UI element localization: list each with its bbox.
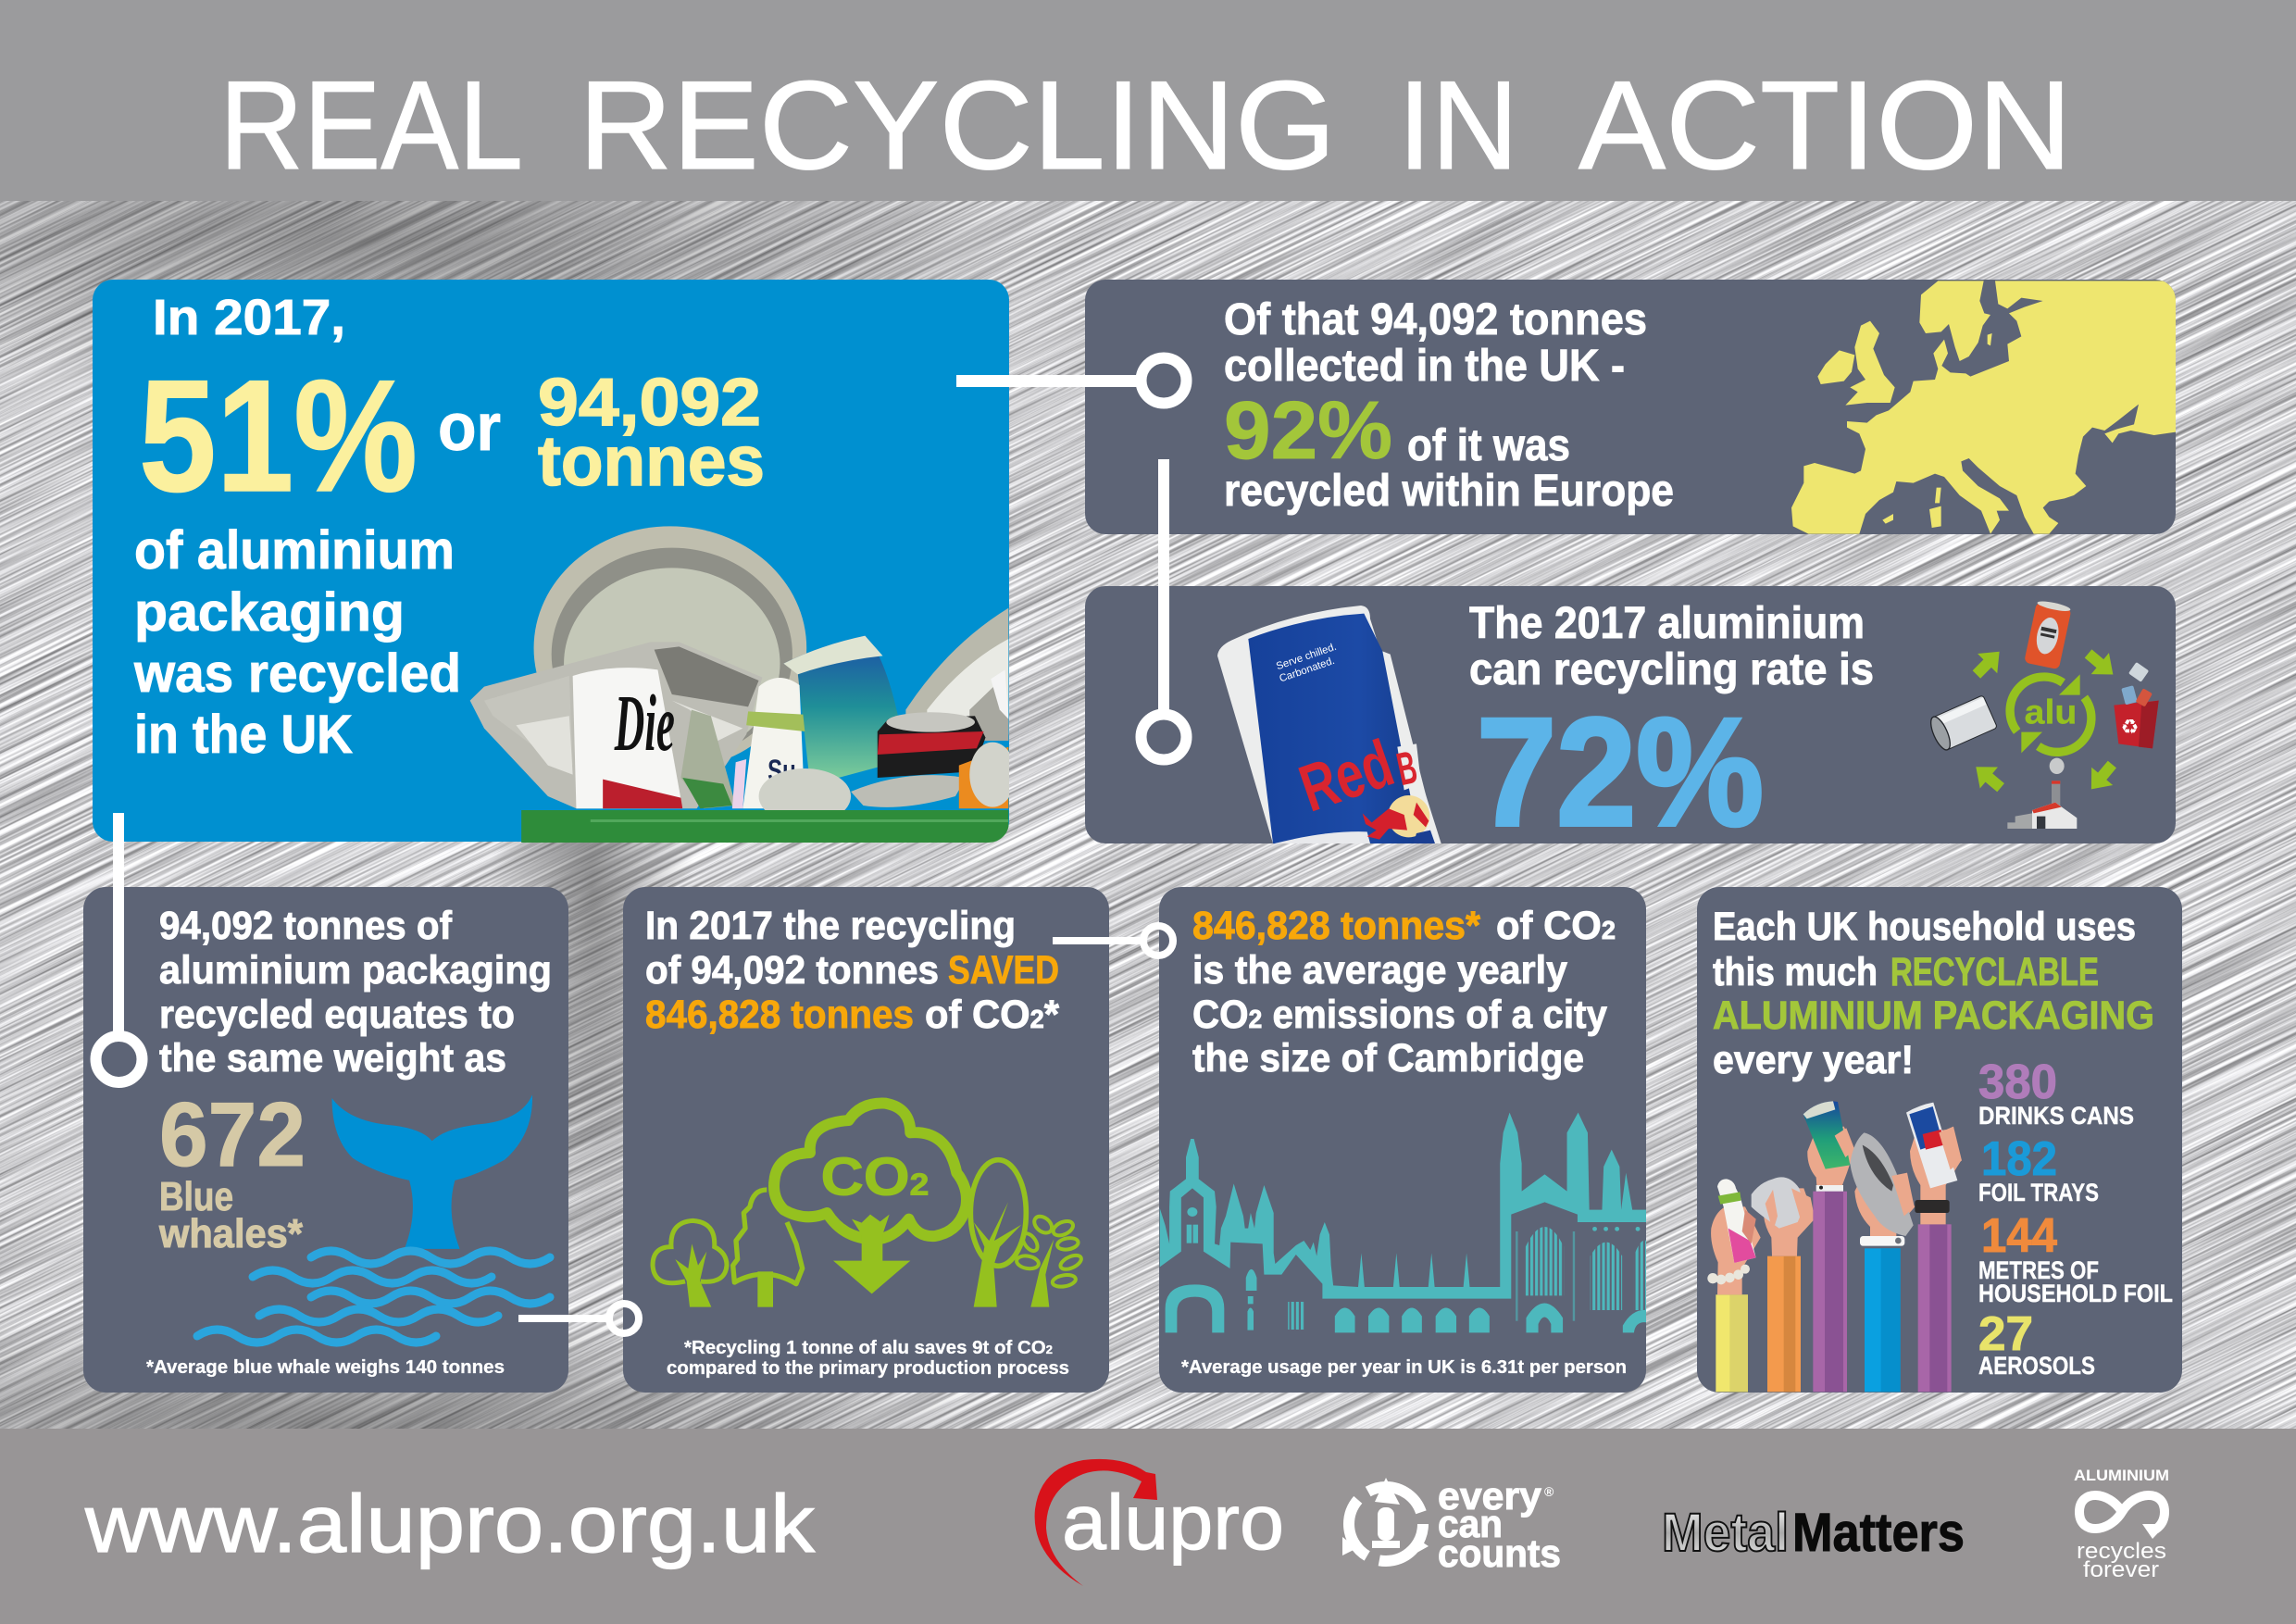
logo: aluminium recycles forever: ALUMINIUM [2074,1467,2169,1484]
text: household uses: RECYCLABLE [1890,950,2099,994]
panel: blue whales [83,887,568,1393]
text: household uses [1713,905,2154,1082]
logo: every can counts: every [1438,1474,1542,1518]
text: recycling saved: 846,828 tonnes [645,993,914,1037]
text: of that 94,092 tonnes: collected in the UK - [1224,342,1625,391]
stat: 51 percent: 51% [139,347,418,525]
arm 2: orange sleeve with foil ball [1752,1177,1815,1392]
icon: cloud [774,1104,967,1239]
stat list: yearly items: DRINKS CANS [1978,1102,2134,1130]
stat: 92 percent: 92% [1224,384,1392,476]
icon: Cambridge skyline [1160,1113,1647,1332]
footer band [0,1429,2296,1624]
icon: round tree [653,1220,727,1307]
text: of it was recycled within Europe: of it was [1407,421,1570,470]
photo: foil trays and cans in green bin: Su [767,754,796,788]
text: Cambridge emissions: is the average yearly [1192,948,1567,993]
title [219,55,2072,195]
panel: CO2 saved [623,887,1109,1393]
text: in 2017: In 2017, [153,290,345,345]
title: IN [1398,55,1518,195]
text: of that 94,092 tonnes: Of that 94,092 tonnes [1224,295,1647,344]
stat: 94,092 tonnes [538,366,765,501]
text: recycling saved: In 2017 the recycling [645,904,1016,948]
stat: 94,092 tonnes: 94,092 [538,366,761,440]
icon: whale tail [332,1094,532,1249]
stat list: yearly items: 380 [1978,1056,2057,1109]
stat list: yearly items: METRES OF [1978,1256,2099,1284]
photo: drinks can: Carbonated. [1278,656,1336,685]
footnote: whale weight: *Average blue whale weighs 140 tonnes [146,1357,505,1378]
text: recycling saved: of CO2* [925,993,1059,1037]
header band [0,0,2296,201]
text: Cambridge emissions: of CO2 [1496,904,1616,948]
photo: drinks can: Serve chilled. [1275,642,1338,672]
stat list: yearly items: 27 [1978,1307,2033,1361]
icon: recycling bin: ♻ [2121,717,2139,740]
logo: aluminium recycles forever [2074,1467,2169,1582]
text: Cambridge emissions: CO2 emissions of a city [1192,993,1607,1037]
photo: foil trays and cans in green bin: Die [614,680,675,768]
icon: CO2 cloud and trees [653,1104,1083,1307]
stat list: yearly items [1978,1056,2173,1380]
text: of aluminium packaging: was recycled [133,643,461,704]
text: of it was recycled within Europe [1224,421,1674,516]
text: 94,092 tonnes equates: recycled equates to [159,993,515,1037]
text: of that 94,092 tonnes [1224,295,1647,391]
panel: household usage [1697,887,2182,1393]
logo: alupro [1035,1459,1284,1586]
arm 3: purple sleeve with can [1803,1101,1854,1392]
text: 94,092 tonnes equates: the same weight as [159,1036,506,1081]
text: blue whales [158,1174,304,1256]
icon: small plant [1016,1213,1083,1307]
photo: drinks can: B [1392,741,1421,795]
stat: 94,092 tonnes: tonnes [538,422,765,501]
icon: tall tree [970,1160,1026,1307]
brushed metal background [0,201,2296,1429]
logo: Metal Matters [1662,1503,1965,1563]
panel: Cambridge emissions [1159,887,1647,1393]
footnote: average usage: *Average usage per year in UK is 6.31t per person [1181,1357,1627,1378]
text: of aluminium packaging [133,520,461,765]
logo: every can counts: ® [1544,1484,1554,1499]
map: Europe [1791,281,2176,534]
stat list: yearly items: AEROSOLS [1978,1352,2095,1380]
text: household uses: every year! [1713,1038,1914,1082]
logo: aluminium recycles forever: forever [2083,1557,2159,1582]
footer website: www.alupro.org.uk [84,1478,816,1569]
text: 94,092 tonnes equates: 94,092 tonnes of [159,904,453,948]
text: 94,092 tonnes equates: aluminium packaging [159,948,552,993]
text: blue whales: Blue [159,1174,233,1219]
connector: blue panel to Europe panel [956,357,1187,404]
icon: green arrows [1966,642,2123,798]
panel: 92 percent recycled in Europe [1085,280,2176,534]
text: Cambridge emissions [1192,904,1616,1081]
title: ACTION [1578,55,2072,195]
text: of aluminium packaging: packaging [134,582,405,643]
arm 5: purple sleeve with can and watch [1906,1103,1962,1392]
photo: foil trays and cans in green bin [470,526,1016,844]
text: blue whales: whales* [158,1211,304,1256]
photo: drinks can: Red [1291,726,1403,826]
text: CO2 in cloud: CO2 [821,1148,929,1207]
footnote: CO2 saving: *Recycling 1 tonne of alu saves 9t of CO 2 [684,1338,1053,1358]
text: 94,092 tonnes equates [159,904,552,1081]
text: the 2017 aluminium can recycling rate: can recycling rate is [1469,645,1874,694]
illustration: raised arms holding packaging [1707,1101,1962,1392]
logo: every can counts [1342,1474,1561,1575]
footnote: CO2 saving [667,1338,1069,1379]
icon: down arrow [833,1215,910,1293]
icon: recycling loop [1927,599,2159,829]
stat list: yearly items: FOIL TRAYS [1978,1179,2099,1206]
arm 1: yellow sleeve with aerosol [1707,1179,1761,1392]
text: household uses: this much [1713,950,1878,994]
logo: alupro: alupro [1062,1479,1284,1566]
footnote: CO2 saving: compared to the primary production process [667,1358,1069,1379]
text: household uses: ALUMINIUM PACKAGING [1713,993,2154,1038]
icon: alu arrows ring [2010,674,2091,753]
title: REAL [219,55,523,195]
text: recycling saved: of 94,092 tonnes [645,948,939,993]
connector: Europe panel to can panel [1141,459,1187,759]
text: of aluminium packaging: in the UK [134,705,353,765]
text: household uses: Each UK household uses [1713,905,2136,949]
text: Cambridge emissions: 846,828 tonnes* [1192,904,1480,948]
connector: whale panel to CO2 panel [518,1304,639,1333]
title: RECYCLING [579,55,1336,195]
icon: factory [2007,758,2077,829]
logo: every can counts: can [1438,1502,1503,1545]
connector: blue panel to whale panel [96,813,143,1082]
logo: every can counts: counts [1438,1531,1561,1575]
logo: aluminium recycles forever: recycles [2077,1539,2166,1564]
icon: recycling bin [2114,662,2159,748]
text: Cambridge emissions: the size of Cambridge [1192,1036,1584,1081]
text: of it was recycled within Europe: recycled within Europe [1224,467,1674,516]
icon: foil roll [1927,694,1997,753]
icon: alu arrows ring: alu [2025,693,2077,731]
logo: Metal Matters: Matters [1792,1503,1965,1563]
text: the 2017 aluminium can recycling rate: The 2017 aluminium [1469,599,1865,648]
text: recycling saved: SAVED [948,948,1059,993]
panel: UK recycling 51% [93,280,1016,844]
text: the 2017 aluminium can recycling rate [1469,599,1874,694]
icon: pine tree [733,1190,803,1307]
connector: CO2 panel to Cambridge panel [1053,926,1173,956]
stat list: yearly items: HOUSEHOLD FOIL [1978,1280,2173,1307]
icon: red can [2024,599,2072,669]
text: recycling saved [645,904,1059,1037]
panel: 72 percent can recycling rate [1085,586,2176,858]
icon: water waves [197,1251,550,1343]
photo: drinks can [1217,606,1441,843]
text: of aluminium packaging: of aluminium [134,520,455,581]
stat list: yearly items: 182 [1981,1132,2057,1186]
logo: Metal Matters: Metal [1662,1503,1789,1563]
arm 4: blue sleeve with foil tray [1850,1132,1915,1392]
stat: 672: 672 [159,1083,306,1185]
stat: 72 percent: 72% [1477,687,1764,858]
stat list: yearly items: 144 [1981,1209,2057,1263]
text: or: or [438,391,501,465]
